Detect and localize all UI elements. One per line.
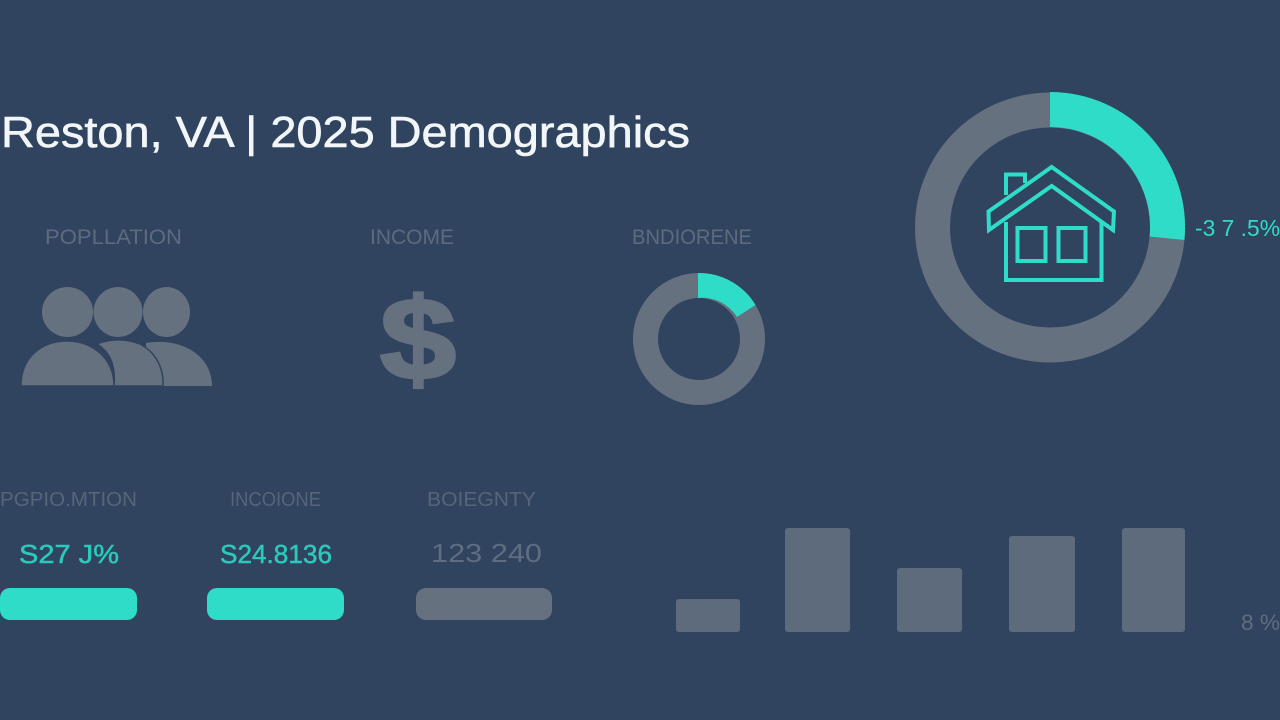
label: bar chart percent: 8 % bbox=[1241, 610, 1280, 635]
panel: top row population bbox=[21, 226, 212, 386]
label: INCOIONE bbox=[230, 489, 321, 511]
heading: third metric: BNDIORENE bbox=[632, 226, 752, 249]
title: Reston, VA | 2025 Demographics bbox=[1, 108, 690, 157]
panel: bottom third stat bbox=[416, 489, 552, 620]
heading: population: POPLLATION bbox=[45, 226, 182, 249]
chart: large housing donut bbox=[932, 92, 1280, 345]
panel: top row small donut bbox=[632, 226, 756, 392]
value: housing share: -3 7 .5% bbox=[1195, 215, 1280, 241]
value: S27 J% bbox=[19, 539, 119, 569]
panel: bottom income stat bbox=[207, 489, 344, 620]
label: PGPIO.MTION bbox=[0, 489, 137, 511]
progress bar bbox=[416, 588, 552, 620]
chart: bar chart bbox=[676, 528, 1185, 632]
value: S24.8136 bbox=[220, 539, 332, 569]
chart: small donut bbox=[646, 273, 756, 392]
progress bar bbox=[207, 588, 344, 620]
panel: bottom population stat bbox=[0, 489, 137, 620]
icon: people group bbox=[21, 287, 212, 386]
icon: dollar sign: $ bbox=[380, 274, 456, 404]
value: 123 240 bbox=[431, 538, 542, 568]
icon: house bbox=[988, 167, 1114, 280]
progress bar bbox=[0, 588, 137, 620]
heading: income: INCOME bbox=[370, 226, 454, 249]
panel: top row income bbox=[370, 226, 456, 404]
label: BOIEGNTY bbox=[427, 489, 536, 511]
